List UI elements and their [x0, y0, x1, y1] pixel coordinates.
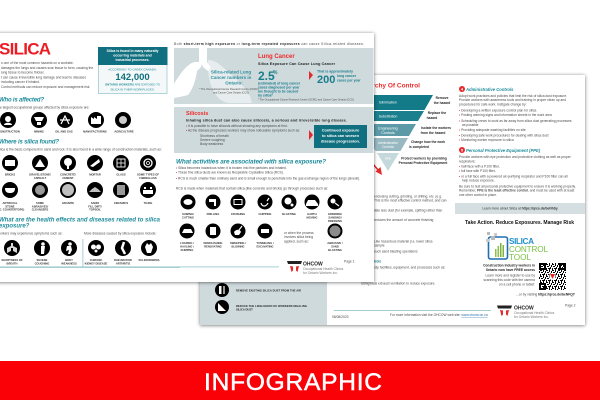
text: reduce likelihood: REDUCE THE LIKELIHOOD OF WORKERS INHALING [236, 304, 307, 308]
text: ontario numbers [211, 70, 252, 86]
text: activity bullets: • These fine silica dusts are known as Respirable Crystalline Silica (RCS). [176, 170, 284, 174]
text: silicosis bullets: Severe coughing [200, 138, 225, 142]
icons: symptoms: BODY [65, 258, 73, 262]
icons: activities row 1: DRESSING [328, 219, 342, 223]
icons: materials row 2: STONE [5, 204, 15, 208]
icons: activities row 2: RENOVATING [204, 244, 222, 248]
callout: continued exposure: to silica can worsen [322, 133, 360, 138]
text: estimated cases: by silica* [258, 94, 273, 98]
heading: administrative controls: Administrative Controls [465, 87, 514, 92]
icons: materials row 1: MORTAR [89, 172, 101, 176]
callout: continued exposure [314, 125, 367, 148]
callout: continued exposure: Continued exposure [322, 128, 360, 132]
text: date: 08/08/2023 [332, 315, 349, 319]
icons: affected groups [0, 112, 134, 134]
callout: continued exposure: disease progression. [321, 138, 360, 144]
callout: 142,000 Ontario workers [98, 47, 168, 94]
logo: OHCOW page 3: Occupational Health Clinics [514, 311, 555, 315]
icon: reduce inhalation [215, 300, 229, 314]
stat: 200 cases: lung cancer [337, 74, 357, 78]
text: silicosis bullets: Body weakness [200, 142, 223, 146]
icons: materials row 2: ARTIFICIAL [3, 201, 18, 205]
text: or when applied: involves silica being [284, 235, 313, 239]
icons: symptoms: WEAKNESS [61, 262, 77, 266]
text: PPE body: • half-face with a P100 filter, [459, 164, 500, 168]
text: estimated cases: cases diagnosed per year [258, 86, 300, 90]
callout: 142,000 Ontario workers: SILICA IN THEIR WORKPLACES. [110, 88, 155, 92]
icons: activities row 2: BLASTING [328, 248, 342, 252]
icon: number 4 badge [459, 86, 465, 92]
icon: number 4 badge: 4 [461, 86, 464, 92]
icons: diseases: RHEUMATOID [114, 258, 132, 262]
text: engineering controls body fragments: Like hazardous material (i.e. lower silica [374, 240, 433, 244]
logo: OHCOW page 3: for Ontario Workers Inc. [514, 315, 549, 319]
logo: OHCOW page 1: OHCOW [303, 262, 323, 268]
chart: hierarchy triangle: Administrative [378, 141, 398, 145]
text: PPE body: • or a full face with a powered air-purifying respirator and P100 filter can all [459, 174, 568, 178]
heading: who is affected: Who is affected? [0, 98, 44, 104]
text: intro: damages the lungs and causes scar tissue to form, causing the [1, 66, 93, 70]
text: silicosis bullets: • It is possible to have silicosis without showing any symptoms at first. [186, 124, 288, 128]
icons: materials row 1 [2, 155, 159, 180]
icons: symptoms: COUGHING [35, 262, 49, 266]
stat: 200 cases: cases per year [337, 78, 361, 82]
text: disease intro: More diseases caused by silica exposure include: [84, 232, 156, 236]
callout: 142,000 Ontario workers: ACCORDING TO CAREX CANADA, [108, 68, 157, 72]
text: PPE body: Provide workers with eye protection and protective clothing as well as proper [459, 155, 572, 159]
text: reduce likelihood: SILICA DUST [236, 308, 253, 312]
text: PPE body [459, 155, 576, 197]
icons: symptoms [1, 240, 77, 266]
icons: affected groups: OIL AND GAS [55, 130, 73, 134]
text: hierarchy labels: Remove [436, 96, 449, 100]
icons: materials row 2: TILING [144, 201, 152, 205]
banner: infographic [0, 361, 600, 400]
text: silicosis bullets: Shortness of breath [200, 134, 229, 138]
icons: activities row 2: HAULING / [180, 244, 194, 248]
text: ontario numbers: Ontario: [225, 80, 243, 86]
icons: diseases: CHRONIC [90, 258, 102, 262]
stat: 200 cases: 200 [317, 74, 335, 86]
text: construction workers access [483, 264, 535, 286]
text: PPE body: Be sure to test all personal protective equipment to ensure it is working properly. [459, 184, 576, 188]
icons: diseases: SCLERODERMA [138, 258, 160, 262]
chart: hierarchy triangle: Substitution [379, 114, 397, 118]
text: engineering controls body fragments: clip facilities, equipment, and processes such as: [374, 266, 445, 270]
text: lung footnote: * The Occupational Cancer Research Centre (OCRC) and Cancer Care Ontario (CCO) [258, 98, 354, 102]
text: activity bullets: RCS is made when materials that contain silica (like concrete and bricks) go through processes such as: [176, 186, 328, 190]
panel: grey engineering controls panel [200, 75, 327, 325]
logo: OHCOW page 3 [497, 306, 555, 319]
text: occupational groups: e largest occupational groups affected by silica exposure are: [0, 106, 89, 110]
icons: materials row 2: FILL DIRT/ [88, 204, 102, 208]
text: page 2: Page 2 [565, 304, 576, 308]
text: administrative controls body: • Developing safe work procedures for dealing with silica dust [459, 134, 549, 138]
text: silicosis subhead: Inhaling silica dust can also cause silicosis, a serious and irreversible lung disease. [186, 118, 347, 122]
icons: materials row 1: SOME TYPES OF [137, 172, 159, 176]
callout: 142,000 Ontario workers: industrial processes. [116, 58, 150, 62]
icons: activities row 1: SAWING/ [182, 212, 194, 216]
chart: hierarchy triangle: Controls [381, 131, 395, 135]
icons: materials row 2: SOME [36, 201, 44, 205]
icons: symptoms: SEVERE [37, 258, 48, 262]
text: construction workers access: scanning this code with the camera [484, 278, 535, 282]
text: hierarchy labels: from the hazard [421, 131, 445, 135]
text: hierarchy labels: Isolate the workers [421, 126, 451, 130]
icons: diseases: KIDNEY DISEASE [85, 262, 108, 266]
text: estimated cases: are thought to be caused [258, 90, 298, 94]
icons: affected groups: MANUFACTURING [83, 130, 107, 134]
icons: activities row 2: SWEEPING / [230, 241, 246, 245]
panel: lung cancer [174, 48, 374, 104]
text: administrative controls body: Adopt work practices and policies that limit the risk of silica dust exposure. [459, 94, 567, 98]
text: ontario numbers: Cancer numbers in [211, 75, 252, 80]
chart: hierarchy triangle: Elimination [379, 100, 397, 104]
heading: hierarchy of control: Hierarchy Of Control [356, 82, 420, 90]
icons: materials row 2: CLEANSERS [32, 208, 48, 212]
text: administrative controls body: • Developing a written exposure control plan for silica [459, 108, 537, 112]
icons: activities row 2 [180, 224, 343, 252]
text: administrative controls body: • Monitoring worker exposure to silica [459, 138, 514, 142]
icons: activities row 1: CRUSHING [231, 212, 245, 216]
text: administrative controls body: • Providing adequate washing facilities on site [459, 128, 526, 132]
stat: 2.5%: % [273, 70, 278, 76]
callout: 142,000 Ontario workers: occurring materials and [113, 54, 152, 58]
text: construction workers access: Learn more and register to use by [486, 274, 535, 278]
text: page 1: Page 1 [344, 260, 355, 264]
icons: activities row 2: SAND [331, 244, 339, 248]
panel: silicosis [174, 107, 374, 153]
title: SILICA: SILICA [0, 40, 51, 58]
icons: materials row 1: CONCRETE/ [60, 172, 76, 176]
text: more information: For more information visit the OHCOW web site: www.ohcow.on.ca [390, 313, 488, 317]
text: estimated cases: (estimated) of lung cancer [258, 82, 301, 86]
text: hierarchy labels: the hazard [434, 101, 450, 105]
icons: materials row 1: FIBREGLASS [139, 176, 157, 180]
heading: lung cancer: Lung Cancer [258, 54, 295, 60]
callout: learn more band: Learn more about Silica at https://qrco.de/beNhSy [482, 206, 558, 210]
text: estimated cases [258, 82, 301, 98]
text: administrative controls body: • Posting warning signs and information sheets in the work area [459, 113, 552, 117]
text: activity bullets: • Silica becomes hazardous when it is broken into fine particles and inhaled. [176, 166, 287, 170]
text: activity bullets [176, 166, 360, 190]
chart: hierarchy triangle: PPE [385, 157, 391, 161]
text: administrative controls body [459, 94, 572, 142]
icons: materials row 2: CERAMICS [114, 201, 128, 205]
heading: take action: Take Action. Reduce Exposures. Manage Risk [465, 220, 574, 226]
text: remove existing silica dust: REMOVE EXISTING SILICA DUST FROM THE AIR [236, 288, 301, 292]
icons: symptoms: BREATH [6, 262, 18, 266]
arrow: red effectiveness arrow [340, 100, 382, 175]
icons: activities row 1: DRILLING [207, 212, 219, 216]
icons: activities row 1: CHIPPING [258, 212, 272, 216]
text: hierarchy labels: hazard [427, 116, 437, 120]
text: activity bullets: • RCS is much smaller than ordinary sand and is small enough to penetrate into the gas exchange region of the lungs (alveoli). [176, 176, 360, 180]
text: engineering controls body fragments: trols [374, 260, 381, 264]
text: reduce likelihood [236, 304, 307, 312]
text: administrative controls body: Provide workers with awareness tools and training in proper clean up and [459, 98, 566, 102]
callout: 142,000 Ontario workers: 142,000 [115, 72, 150, 83]
text: or when applied: applied, such as: [284, 240, 309, 244]
text: construction workers access: Construction Industry workers in [483, 264, 535, 268]
stat: 200 cases: That is approximately [317, 70, 353, 74]
icons: materials row 1: ASPHALT [34, 176, 47, 180]
logo: OHCOW page 1 [287, 261, 344, 275]
icons: diseases: ARTHRITIS [116, 262, 130, 266]
footer line [334, 309, 491, 312]
icon: number 5 badge [459, 147, 465, 153]
text: lung footnote left: * The Occupational Cancer Research Centre (OCRC) [199, 88, 259, 91]
text: intro: lung tissue to become thicker. [1, 70, 45, 74]
text: PPE body: one other control in place. [459, 193, 497, 197]
logo: OHCOW page 1: for Ontario Workers Inc. [303, 271, 338, 275]
icons: activities row 2: DUMPING [181, 248, 193, 252]
text: symptom intro: orkers may experience symptoms such as: [0, 232, 63, 236]
text: PPE body: • full face with P100 filter, [459, 169, 496, 173]
icons: activities row 1 [180, 194, 342, 223]
icons: activities row 2: LOADING / [180, 241, 194, 245]
heading: activities: What activities are associated with silica exposure? [176, 158, 326, 166]
text: engineering controls body fragments [361, 194, 447, 286]
stat: 2.5%: 2.5 [258, 69, 275, 83]
icons: affected groups: AGRICULTURE [114, 130, 134, 134]
logo: silica control tool: TOOL [509, 253, 531, 262]
heading: health effects: What are the health effects and diseases related to silica [0, 218, 161, 224]
text: administrative controls body: • Scheduling crews to work as far away from silica dust generating processes [459, 119, 572, 123]
text: hierarchy labels: Protect workers by providing [401, 156, 447, 160]
text: engineering controls body fragments: Using local exhaust ventilation to reduce exposure. [361, 282, 435, 286]
text: hierarchy labels [399, 96, 451, 165]
icon: remove silica from air [215, 283, 229, 297]
text: intro: t can cause irreversible lung damage and lead to diseases [1, 76, 86, 80]
logo: silica control tool: SILICA [509, 237, 534, 246]
text: engineering controls body fragments: reduces the amount of concrete finishing [374, 218, 434, 222]
icon: QR code [539, 263, 566, 290]
panel: back page 3 hierarchy of control [200, 75, 585, 325]
icons: activities row 1: MOVING [307, 216, 317, 220]
text: basic component: lica is the basic component in sand and rock. It is also found in a wide range of construction materials, such as: [0, 148, 162, 152]
text: silica exposure subhead: Silica Exposure Can Cause Lung Cancer [258, 62, 336, 66]
logo: OHCOW page 3: OHCOW [514, 306, 534, 312]
icons: affected groups: MINING [34, 130, 44, 134]
logo: OHCOW page 1: Occupational Health Clinics [303, 267, 344, 271]
text: hierarchy labels: is completed [409, 145, 429, 149]
icons: materials row 1: GRAVEL/STONE/ [29, 172, 51, 176]
chart: hierarchy triangle: Controls [382, 145, 394, 149]
text: or when applied: or when the process [284, 231, 314, 235]
text: or when applied [284, 231, 314, 244]
text: lung footnote left [199, 88, 259, 94]
text: engineering controls body fragments: such sand blasting operations [374, 250, 418, 254]
text: intro [1, 61, 93, 89]
icons: materials row 1: CEMENT [62, 176, 74, 180]
text: intro: s one of the most common hazards on a worksite. [1, 61, 74, 65]
chart: hierarchy triangle: Engineering [378, 126, 398, 130]
chart: hierarchy triangle [343, 95, 433, 171]
text: lung footnote left: and Cancer Care Ontario (CCO) [213, 92, 249, 94]
divider [82, 239, 84, 267]
icons: activities row 1: CUTTING [182, 216, 194, 220]
text: PPE body: respirators: [459, 160, 476, 164]
heading: health effects [0, 218, 161, 230]
arrow: to 200 [309, 71, 313, 80]
icons: activities row 1: GRINDING/ [328, 212, 342, 216]
heading: where is silica found: Where is silica found? [0, 140, 59, 146]
text: hierarchy labels: Change how the work [411, 140, 445, 144]
icons: activities row 2: BLOWING [232, 244, 244, 248]
footer line [0, 266, 279, 268]
text: engineering controls body fragments: enclosing cutting, grinding, or drilling, etc. (e.g. [374, 194, 442, 198]
heading: personal protective equipment: Personal Protective Equipment (PPE) [466, 148, 541, 153]
icons: activities row 1: SANDING/ [328, 216, 342, 220]
icons: activities row 2: DEMOLISHING [204, 241, 222, 245]
icons: materials row 1: BRICKS [5, 172, 15, 176]
text: administrative controls body: procedures for safe work. Instigate change by: [459, 102, 527, 106]
icons: activities row 2: EXCAVATING [256, 244, 274, 248]
icons: materials row 1: GLASS [116, 172, 126, 176]
icons: activities row 1: BLASTING [282, 212, 296, 216]
text: administrative controls body: as possible [462, 123, 479, 127]
icons: materials row 2 [0, 182, 156, 212]
icon: lungs [174, 48, 252, 103]
icons: materials row 2: ABRASIVES/ [32, 204, 48, 208]
text: engineering controls body fragments: sample [374, 244, 385, 248]
icons: materials row 2: TOPSOIL [89, 208, 101, 212]
text: hierarchy labels: Personal Protective Equipment [399, 161, 448, 165]
text: PPE body: Remember, PPE is the least effective control, and must be used with at least [459, 188, 574, 192]
icons: activities row 1: EARTH [307, 212, 317, 216]
icons: materials row 2: SAND/ [91, 201, 99, 205]
text: visiting link: ...or by visiting https://qrco.de/beNFQY [516, 292, 576, 296]
text: engineering controls body fragments: ilate less dust (for example, spitting rather than [374, 208, 443, 212]
text: construction workers access: on a cell phone or tablet: [499, 282, 535, 286]
callout: 142,000 Ontario workers: ONTARIO WORKERS ARE EXPOSED TO [105, 82, 161, 86]
text: hierarchy labels: Replace the [428, 111, 446, 115]
icons: activities row 2: ABRASIVE / [327, 241, 343, 245]
icons: materials row 2: GRANITE [62, 201, 74, 205]
callout: learn more band [455, 203, 585, 214]
text: silicosis bullets [186, 124, 300, 146]
text: intro: Control methods can reduce exposure and management risk [1, 85, 90, 89]
text: exposure intro: Both short-term high exposures or long-term repeated exposures can cause Silica-related diseases: [174, 42, 364, 46]
icons: diseases [85, 240, 160, 266]
logo: silica control tool: CONTROL [509, 245, 548, 254]
icon: number 5 badge: 5 [461, 148, 464, 152]
icons: symptoms: SHORTNESS OF [1, 258, 23, 262]
text: ontario numbers: Silica-related Lung [211, 70, 251, 74]
footer line [0, 266, 180, 269]
callout: 142,000 Ontario workers: Silica is found in many naturally [107, 49, 159, 53]
text: engineering controls body fragments: This is the most effective control method, and can [374, 198, 447, 202]
heading: silicosis: Silicosis [186, 111, 208, 117]
arrow: to callout [309, 130, 313, 140]
text: intro: including cancer if inhaled. [1, 80, 40, 84]
text: silicosis bullets: • As the disease progresses workers may show noticeable symptoms such as: [186, 128, 300, 132]
text: PPE body: help reduce exposure. [462, 178, 495, 182]
logo: silica control tool [486, 232, 548, 262]
text: construction workers access: Ontario now have FREE access [486, 268, 535, 272]
panel: front page 1 [0, 33, 374, 282]
icons: activities row 2: TUNNELING / [256, 241, 274, 245]
stat: 200 cases [317, 70, 361, 86]
banner: infographic: INFOGRAPHIC [204, 369, 382, 396]
